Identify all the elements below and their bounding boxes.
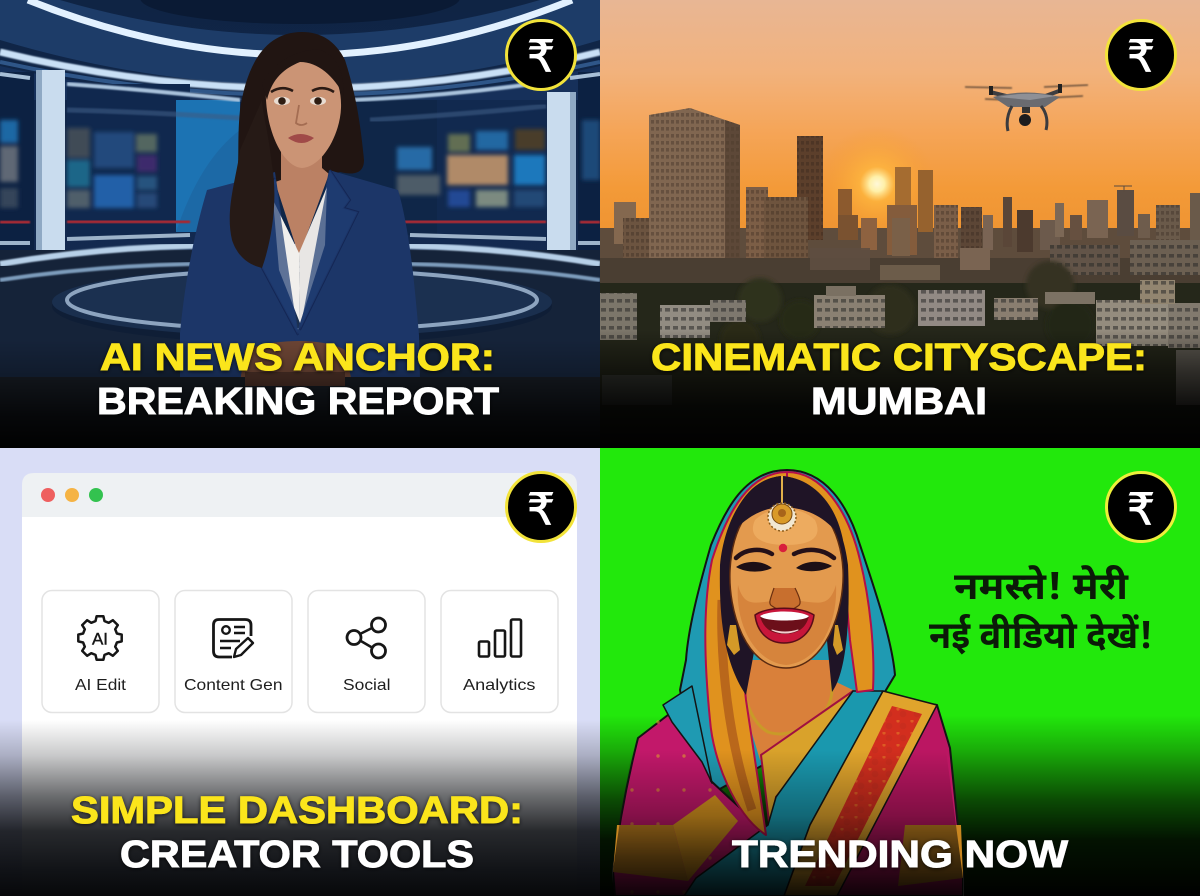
icon: rupee badge: ₹	[1127, 484, 1155, 536]
panel: cinematic cityscape	[600, 0, 1200, 448]
card: Social: Social	[343, 677, 390, 694]
icon: rupee badge: ₹	[527, 484, 555, 536]
sleeve cuffs	[613, 825, 963, 886]
studio ceiling arcs	[0, 0, 600, 100]
red and gold border	[784, 691, 937, 896]
hair top over forehead	[727, 476, 843, 540]
heading: creator tools: CREATOR TOOLS	[120, 834, 474, 876]
hindi greeting: नमस्ते! मेरी	[954, 564, 1129, 615]
bindi	[779, 544, 787, 552]
card: Content Gen	[175, 590, 292, 712]
panel: simple dashboard	[0, 448, 600, 896]
heading: trending now: TRENDING NOW	[732, 834, 1068, 876]
far skyline	[600, 136, 1200, 258]
foreground towers	[623, 108, 808, 258]
nose	[770, 588, 800, 610]
icon: rupee badge	[506, 20, 576, 90]
icon: rupee badge: ₹	[1127, 32, 1155, 82]
blouse left	[613, 708, 765, 896]
hair	[720, 476, 849, 695]
face	[730, 494, 843, 668]
neck	[742, 660, 853, 760]
low-rise blocks and trees	[600, 240, 1200, 405]
sun	[844, 141, 902, 220]
illustration: laughing woman in saree	[613, 470, 963, 896]
card: Analytics: Analytics	[463, 677, 536, 694]
pillars	[36, 70, 576, 250]
heading: Mumbai: MUMBAI	[811, 381, 987, 423]
veil back	[680, 470, 895, 800]
blouse right	[837, 700, 963, 896]
eyebrows	[736, 550, 834, 558]
hindi greeting: नई वीडियो देखें!	[929, 613, 1153, 664]
bottom fade	[0, 720, 600, 896]
studio windows and blurred monitors	[0, 72, 600, 250]
veil inner border left	[705, 472, 787, 835]
bottom fade	[0, 352, 600, 448]
heading: simple dashboard: SIMPLE DASHBOARD:	[71, 790, 523, 832]
anchor desk	[0, 377, 600, 426]
laughing eyes	[736, 562, 832, 572]
card: AI Edit	[42, 590, 159, 712]
bottom fade	[600, 330, 1200, 448]
pleats gold	[761, 691, 860, 830]
icon: drone	[965, 84, 1088, 131]
studio floor and ring	[0, 246, 600, 380]
earrings	[727, 625, 843, 655]
panel: trending now	[600, 448, 1200, 896]
hindi greeting	[929, 564, 1153, 664]
icon: rupee badge	[1106, 472, 1176, 542]
veil inner border right	[787, 472, 873, 692]
news anchor	[180, 32, 420, 382]
card: AI Edit: AI	[92, 630, 108, 648]
background fade	[600, 715, 1200, 896]
heading: breaking report: BREAKING REPORT	[97, 381, 499, 423]
card: Content Gen: Content Gen	[184, 677, 282, 694]
heading: cinematic cityscape: CINEMATIC CITYSCAPE:	[651, 337, 1147, 379]
teal pallu	[684, 691, 883, 896]
icon: rupee badge: ₹	[527, 32, 555, 82]
icon: rupee badge	[1106, 20, 1176, 90]
panel: AI news anchor	[0, 0, 600, 448]
heading: AI news anchor: AI NEWS ANCHOR:	[100, 337, 495, 379]
icon: rupee badge	[506, 472, 576, 542]
teal shoulder fold	[663, 686, 712, 783]
maang tikka	[768, 476, 796, 531]
saree shading fade	[613, 750, 963, 896]
browser window	[22, 473, 577, 818]
necklace	[742, 681, 832, 734]
card: Social	[308, 590, 425, 712]
card: Analytics	[441, 590, 558, 712]
card: AI Edit: AI Edit	[75, 677, 127, 694]
mouth	[755, 608, 814, 643]
